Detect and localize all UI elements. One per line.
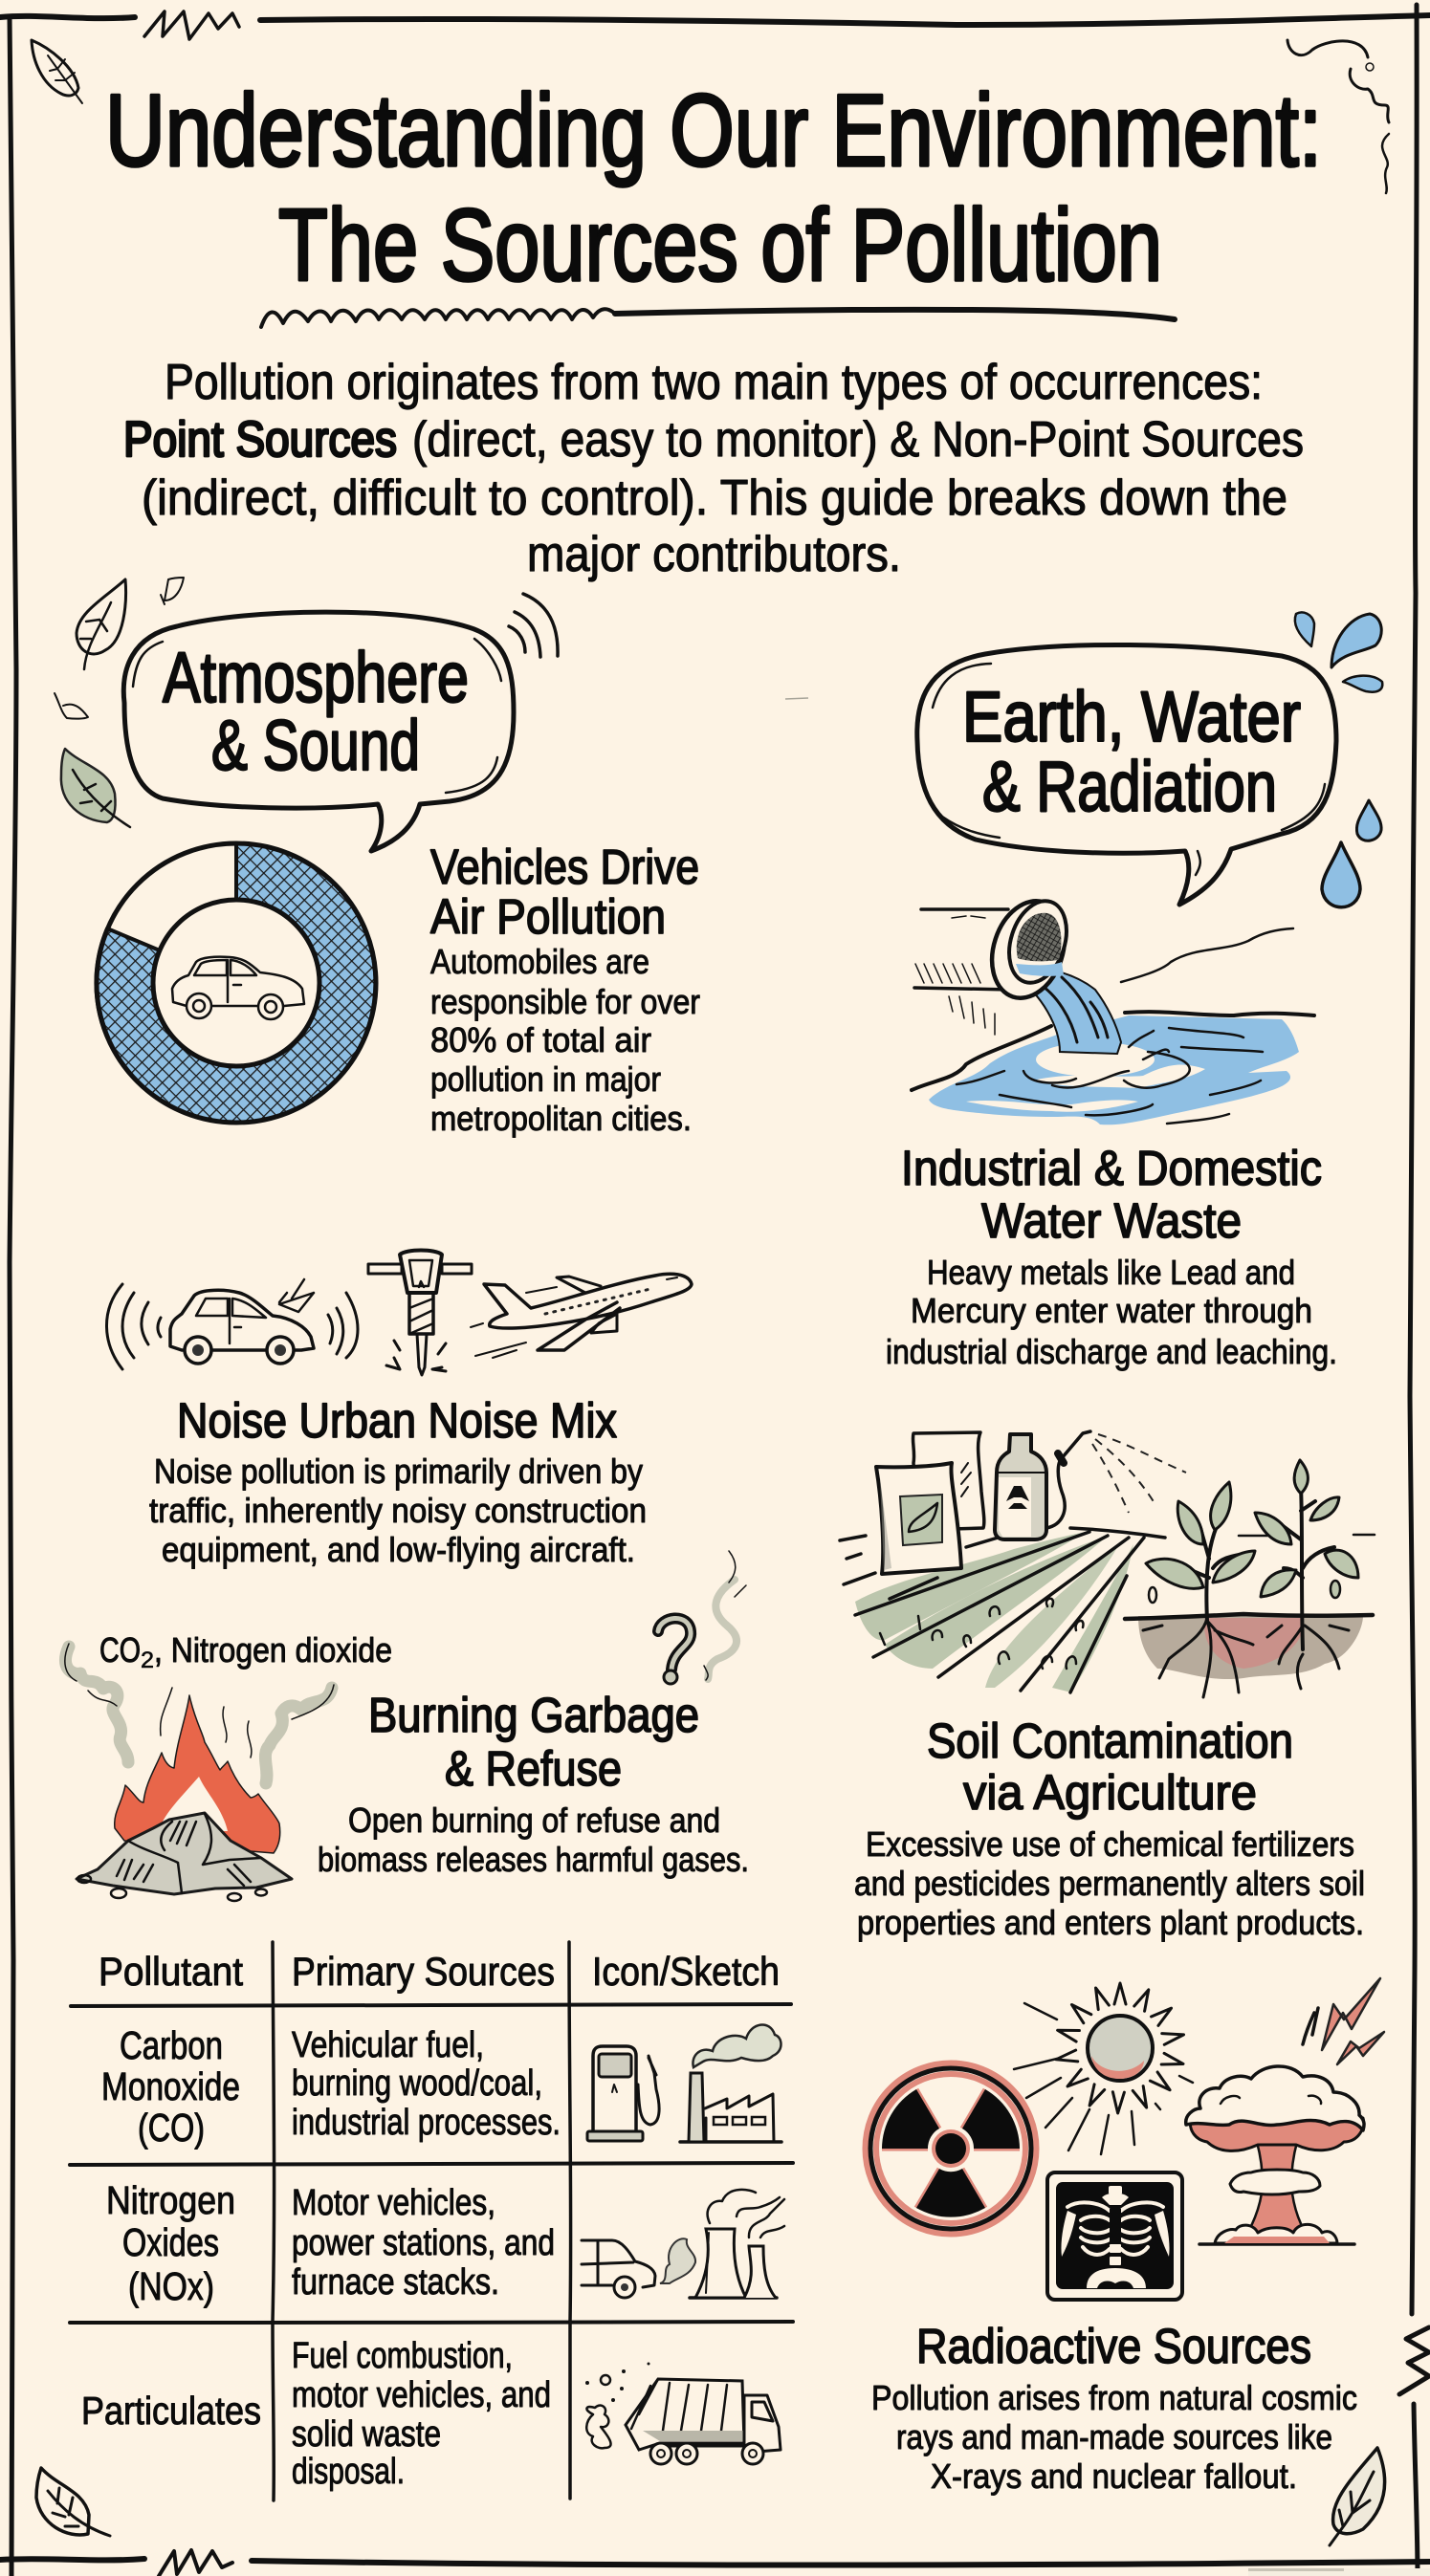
icon: cooling towers [690, 2190, 784, 2298]
row: carbon monoxide: industrial processes. [292, 2103, 561, 2143]
icon: car in donut [172, 957, 304, 1019]
row: particulates: solid waste [292, 2414, 441, 2455]
plants [1146, 1460, 1375, 1649]
text block: noise [149, 1393, 647, 1569]
icon: fuel pump [587, 2046, 659, 2141]
pollutant table [70, 1942, 793, 2500]
gas label: , Nitrogen dioxide [154, 1630, 392, 1670]
text block: water waste: Water Waste [981, 1193, 1242, 1248]
icon: water drops [1295, 612, 1382, 907]
text block: radioactive: Pollution arises from natural cosmic [871, 2378, 1357, 2417]
icon: burning garbage fire [65, 1644, 334, 1901]
title underline [261, 309, 1175, 327]
text block: radioactive: Radioactive Sources [916, 2319, 1311, 2373]
row: nitrogen oxides: Oxides [122, 2220, 219, 2264]
gas label [99, 1630, 392, 1673]
row: carbon monoxide: burning wood/coal, [292, 2063, 542, 2104]
bottom-right cropped patch [1248, 2568, 1430, 2576]
row: nitrogen oxides: Nitrogen [106, 2178, 235, 2222]
text block: soil contamination: via Agriculture [963, 1765, 1257, 1820]
row: nitrogen oxides: furnace stacks. [292, 2262, 499, 2303]
text block: noise: traffic, inherently noisy construction [149, 1491, 647, 1530]
icon: garbage truck [585, 2362, 781, 2464]
decorative swirls: top-right [1287, 40, 1389, 193]
soil [1125, 1614, 1373, 1697]
pesticide bottle and hose [995, 1431, 1186, 1539]
text block: water waste: Heavy metals like Lead and [927, 1253, 1295, 1292]
text block: soil contamination: Excessive use of chemical fertilizers [866, 1824, 1354, 1864]
text block: noise: equipment, and low-flying aircraft. [162, 1530, 635, 1569]
intro text: major contributors. [527, 527, 901, 582]
text block: vehicles [430, 840, 700, 1138]
text block: soil contamination: and pesticides permanently alters soil [854, 1864, 1365, 1903]
row: particulates: motor vehicles, and [292, 2375, 551, 2415]
table header: Icon/Sketch [592, 1949, 780, 1994]
title: The Sources of Pollution [278, 187, 1162, 302]
icon: noisy car [106, 1279, 358, 1369]
speech bubble: Earth, Water & Radiation [917, 644, 1336, 905]
text block: radioactive: X-rays and nuclear fallout. [931, 2456, 1297, 2496]
text block: soil contamination: Soil Contamination [927, 1714, 1293, 1768]
text block: water waste: Industrial & Domestic [901, 1141, 1322, 1195]
text block: burning garbage: & Refuse [445, 1741, 622, 1796]
speech bubble: Atmosphere & Sound [123, 612, 514, 851]
text block: vehicles: metropolitan cities. [430, 1099, 692, 1138]
text block: burning garbage: Burning Garbage [368, 1688, 699, 1742]
table header [99, 1949, 780, 1994]
fertilizer bags [876, 1432, 984, 1574]
text block: water waste: industrial discharge and leaching. [886, 1332, 1337, 1371]
intro text: Pollution originates from two main types of occurrences: [165, 355, 1263, 410]
table header: Primary Sources [292, 1949, 555, 1994]
icon: jackhammer [368, 1251, 472, 1375]
intro text: Point Sources [123, 412, 397, 468]
row: carbon monoxide: Carbon [120, 2023, 223, 2067]
icon: factory [680, 2024, 781, 2142]
row: carbon monoxide: Vehicular fuel, [292, 2025, 484, 2065]
intro text: (direct, easy to monitor) & Non-Point Sources [412, 412, 1304, 468]
icon: car exhaust [582, 2238, 695, 2298]
row: nitrogen oxides: Motor vehicles, [292, 2183, 495, 2223]
row: carbon monoxide [101, 2023, 561, 2150]
text block: soil contamination: properties and enters plant products. [857, 1903, 1364, 1942]
text block: noise: Noise Urban Noise Mix [177, 1393, 617, 1448]
text block: vehicles: 80% of total air [430, 1020, 651, 1059]
row: carbon monoxide: Monoxide [101, 2064, 240, 2108]
donut chart: vehicles 80% of air pollution [96, 843, 376, 1123]
leaves around the Atmosphere bubble [55, 578, 184, 827]
gas label: CO [99, 1630, 141, 1670]
text block: vehicles: Air Pollution [430, 889, 666, 944]
table header: Pollutant [99, 1949, 243, 1994]
icon: question mark [658, 1618, 691, 1684]
title [105, 73, 1322, 302]
intro text: (indirect, difficult to control). This guide breaks down the [142, 470, 1287, 526]
text block: vehicles: pollution in major [430, 1059, 661, 1099]
text block: radioactive: rays and man-made sources like [896, 2417, 1332, 2456]
icon: bottom-right leaf [1330, 2448, 1385, 2545]
faint stray mark [785, 698, 808, 699]
text block: vehicles: responsible for over [430, 982, 700, 1021]
text block: burning garbage: Open burning of refuse and [348, 1801, 720, 1840]
icon: mushroom cloud [1186, 2066, 1364, 2244]
speech bubble: Atmosphere & Sound: Atmosphere [163, 638, 469, 717]
intro text [123, 355, 1304, 582]
text block: burning garbage [318, 1688, 749, 1879]
icon: sound arcs [509, 594, 558, 657]
row: particulates: Fuel combustion, [292, 2336, 513, 2376]
icon: agriculture scene [840, 1431, 1375, 1697]
icon: sun with rays [1014, 1983, 1193, 2154]
speech bubble: Atmosphere & Sound: & Sound [211, 706, 420, 785]
text block: noise: Noise pollution is primarily driven by [154, 1452, 643, 1491]
icon: top-left leaf [32, 40, 82, 103]
row: nitrogen oxides [106, 2178, 555, 2308]
icon: bottom-left leaf [36, 2468, 110, 2536]
text block: burning garbage: biomass releases harmful gases. [318, 1840, 749, 1879]
icon: chest x-ray [1047, 2172, 1182, 2300]
icon: lightning bolts [1303, 1978, 1384, 2064]
icon: discharge pipe and polluted water [912, 891, 1314, 1124]
gas label: 2 [141, 1648, 154, 1673]
icon: radiation symbol [867, 2064, 1035, 2233]
text block: vehicles: Vehicles Drive [430, 840, 699, 894]
row: nitrogen oxides: power stations, and [292, 2223, 555, 2263]
text block: soil contamination [854, 1714, 1365, 1942]
text block: water waste [886, 1141, 1337, 1371]
text block: radioactive [871, 2319, 1357, 2496]
row: carbon monoxide: (CO) [138, 2106, 205, 2150]
speech bubble: Earth, Water & Radiation: Earth, Water [962, 677, 1301, 756]
speech bubble: Earth, Water & Radiation: & Radiation [982, 747, 1277, 826]
row: particulates: Particulates [81, 2389, 261, 2433]
row: nitrogen oxides: (NOx) [128, 2264, 214, 2308]
icon: airplane [471, 1274, 692, 1358]
text block: vehicles: Automobiles are [430, 942, 649, 981]
icon: smoke squiggle [704, 1551, 746, 1680]
field rows [840, 1528, 1165, 1692]
row: particulates: disposal. [292, 2452, 405, 2492]
row: particulates [81, 2336, 551, 2492]
text block: water waste: Mercury enter water through [911, 1291, 1312, 1330]
